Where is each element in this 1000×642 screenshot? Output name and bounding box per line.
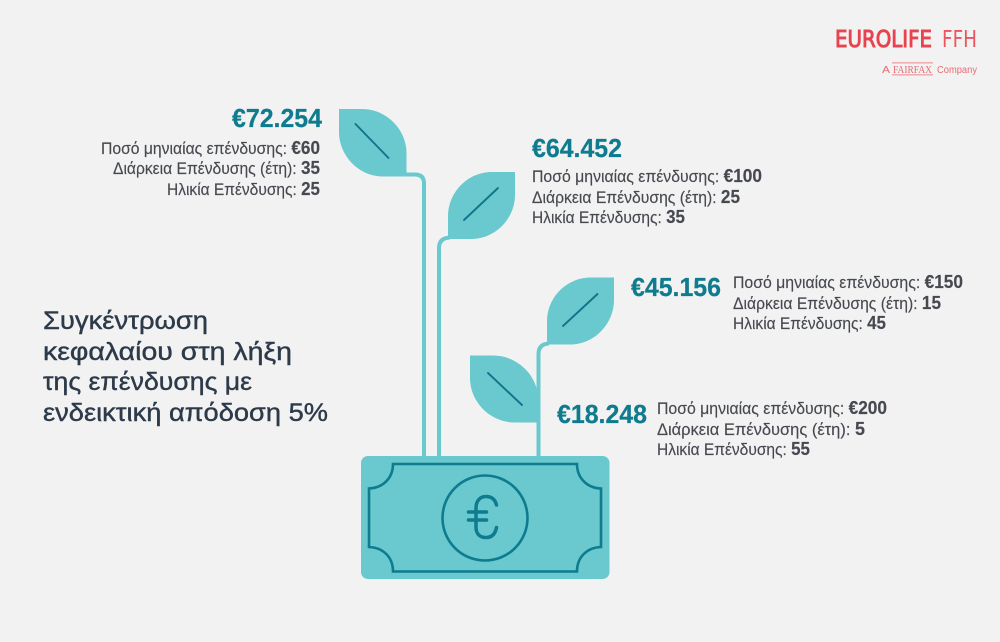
logo: Eurolife FFH: FAIRFAX [893,64,932,76]
logo: Eurolife FFH: Company [937,64,978,76]
details: 45 years old: Ποσό μηνιαίας επένδυσης: €150 [733,272,963,292]
details: 45 years old [733,272,963,333]
details: 25 years old [101,138,320,199]
amount: 45.156: €45.156 [631,274,721,302]
details: 35 years old: Ηλικία Επένδυσης: 35 [532,207,685,227]
logo: Eurolife FFH: FFH [942,27,977,53]
title [43,307,328,427]
details: 55 years old: Ποσό μηνιαίας επένδυσης: €200 [657,398,887,418]
icon: euro sign [468,496,496,538]
amount: 72.254: €72.254 [232,105,323,133]
leaf: middle right [547,278,614,344]
leaf: lower left [470,356,538,422]
details: 55 years old: Διάρκεια Επένδυσης (έτη): 5 [657,419,865,439]
details: 35 years old: Διάρκεια Επένδυσης (έτη): 25 [532,187,740,207]
details: 45 years old: Ηλικία Επένδυσης: 45 [733,313,886,333]
details: 35 years old: Ποσό μηνιαίας επένδυσης: €100 [532,166,762,186]
details: 35 years old [532,166,762,227]
title: Συγκέντρωση [43,307,208,335]
details: 45 years old: Διάρκεια Επένδυσης (έτη): 15 [733,293,941,313]
details: 55 years old [657,398,887,459]
banknote [361,456,610,579]
details: 25 years old: Ηλικία Επένδυσης: 25 [167,179,320,199]
plant stems [404,174,549,458]
logo: Eurolife FFH: A [882,65,890,76]
title: της επένδυσης με [43,368,252,396]
logo: Eurolife FFH [835,27,978,76]
leaf: top right [448,172,515,239]
logo: Eurolife FFH: EUROLIFE [835,27,932,53]
details: 25 years old: Διάρκεια Επένδυσης (έτη): 35 [113,158,320,178]
details: 25 years old: Ποσό μηνιαίας επένδυσης: €60 [101,138,320,158]
title: ενδεικτική απόδοση 5% [43,399,328,427]
title: κεφαλαίου στη λήξη [43,338,292,366]
amount: 18.248: €18.248 [557,401,647,429]
leaf: top left [339,109,406,176]
details: 55 years old: Ηλικία Επένδυσης: 55 [657,439,810,459]
amount: 64.452: €64.452 [532,135,622,163]
